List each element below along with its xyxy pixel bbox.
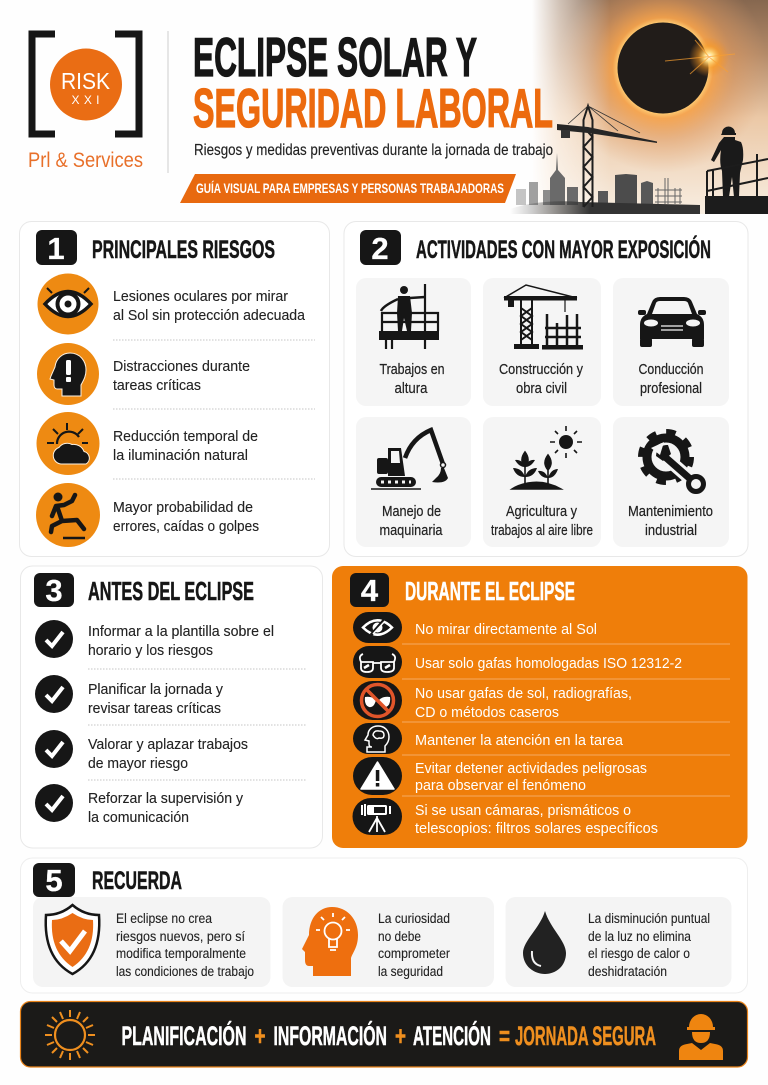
formula text: +: [254, 1021, 266, 1051]
risk text 2: tareas críticas: [113, 377, 201, 394]
risk text 4: Mayor probabilidad de: [113, 499, 253, 516]
label: altura: [394, 381, 428, 397]
logo: XXI: [72, 93, 100, 107]
check item 4: Reforzar la supervisión y: [88, 790, 243, 807]
icon: sun and cloud: [36, 412, 100, 475]
text: La disminución puntual: [588, 911, 710, 926]
check item 1: horario y los riesgos: [88, 642, 213, 659]
icon: sun: [45, 1010, 95, 1060]
formula text: PLANIFICACIÓN: [122, 1020, 246, 1051]
card: riesgos nuevos: [33, 897, 270, 987]
badge 1: [36, 230, 77, 266]
logo: [28, 34, 143, 172]
icon: falling person: [36, 483, 100, 547]
panel: principales riesgos: [20, 222, 330, 556]
label: [380, 504, 443, 539]
check item 4: la comunicación: [88, 809, 189, 826]
heading 4: DURANTE EL ECLIPSE: [405, 576, 575, 606]
risk text 1: Lesiones oculares por mirar: [113, 288, 288, 305]
icon: plants and sun: [512, 426, 582, 489]
measure 5: [415, 760, 647, 794]
check item 4: [35, 784, 243, 826]
label: industrial: [645, 523, 697, 539]
text: El eclipse no crea: [116, 911, 212, 926]
formula text: +: [395, 1021, 406, 1051]
badge 3: [34, 573, 74, 608]
risk text 4: [113, 499, 259, 535]
label: Agricultura y: [506, 504, 578, 520]
badge 5: 5: [45, 863, 63, 898]
logo: Prl & Services: [28, 149, 143, 172]
banner: GUÍA VISUAL PARA EMPRESAS Y PERSONAS TRABAJADORAS: [196, 180, 504, 196]
formula text: ATENCIÓN: [413, 1020, 491, 1051]
icon: head alert: [37, 343, 99, 405]
text: de la luz no elimina: [588, 929, 691, 944]
check item 1: Informar a la plantilla sobre el: [88, 623, 274, 640]
label: [499, 362, 584, 397]
badge 4: 4: [361, 573, 379, 608]
formula text: =: [499, 1021, 510, 1051]
badge 4: [350, 573, 389, 608]
text: comprometer: [378, 946, 450, 961]
icon: worker on scaffold: [379, 284, 439, 349]
icon: crane and building: [504, 285, 583, 350]
icon: head with lightbulb: [302, 907, 358, 976]
subtitle: Riesgos y medidas preventivas durante la jornada de trabajo: [194, 142, 553, 159]
formula text: INFORMACIÓN: [274, 1020, 387, 1051]
heading 5: RECUERDA: [92, 867, 182, 895]
icon: crossed eye: [353, 612, 402, 643]
formula text: JORNADA SEGURA: [515, 1021, 656, 1051]
text: modifica temporalmente: [116, 946, 246, 961]
icon: warning triangle: [353, 757, 402, 795]
icon: no sunglasses: [353, 681, 402, 720]
text: la seguridad: [378, 964, 443, 979]
risk text 1: [113, 288, 306, 324]
label: obra civil: [516, 381, 567, 397]
badge 2: [360, 230, 401, 266]
text: [116, 911, 254, 979]
card: curiosidad: [282, 897, 494, 987]
check item 2: [35, 675, 223, 717]
icon: worker with helmet: [679, 1014, 723, 1060]
header: [28, 0, 768, 214]
badge 1: 1: [47, 231, 65, 266]
label: [380, 362, 444, 397]
label: Mantenimiento: [628, 504, 713, 520]
check item 3: de mayor riesgo: [88, 755, 188, 772]
icon: head with brain: [353, 723, 402, 754]
badge 5: [33, 863, 75, 898]
text: el riesgo de calor o: [588, 946, 690, 961]
measure 3: No usar gafas de sol, radiografías,: [415, 685, 632, 702]
heading 3: ANTES DEL ECLIPSE: [88, 576, 254, 606]
measure 5: para observar el fenómeno: [415, 777, 586, 794]
measure 5: Evitar detener actividades peligrosas: [415, 760, 647, 777]
badge 3: 3: [45, 573, 63, 608]
title: [193, 26, 553, 139]
label: profesional: [640, 381, 702, 397]
label: [638, 362, 704, 397]
text: La curiosidad: [378, 911, 450, 926]
panel: antes del eclipse: [20, 566, 322, 848]
check item 3: [35, 730, 248, 772]
card: conduccion: [613, 278, 729, 406]
text: deshidratación: [588, 964, 667, 979]
check item 2: Planificar la jornada y: [88, 681, 223, 698]
label: Manejo de: [382, 504, 441, 520]
label: Trabajos en: [380, 362, 444, 378]
card: agricultura: [483, 417, 601, 547]
check item 1: [35, 620, 274, 659]
panel: actividades con mayor exposicion: [344, 222, 748, 556]
card: calor: [506, 897, 732, 987]
eclipse illustration: [510, 0, 768, 214]
icon: water drop: [523, 911, 566, 974]
footer formula bar: [20, 1002, 748, 1067]
banner: [180, 174, 516, 203]
formula text: [122, 1020, 656, 1051]
icon: excavator: [371, 430, 448, 489]
risk text 1: al Sol sin protección adecuada: [113, 307, 306, 324]
label: [628, 504, 713, 539]
title: ECLIPSE SOLAR Y: [193, 26, 477, 88]
risk text 2: Distracciones durante: [113, 358, 250, 375]
text: no debe: [378, 929, 421, 944]
check item 3: Valorar y aplazar trabajos: [88, 736, 248, 753]
text: riesgos nuevos, pero sí: [116, 929, 245, 944]
risk text 2: [113, 358, 250, 394]
icon: safety glasses: [353, 646, 402, 678]
label: maquinaria: [380, 523, 443, 539]
card: trabajos en altura: [356, 278, 471, 406]
card: mantenimiento: [613, 417, 729, 547]
measure 3: CD o métodos caseros: [415, 704, 559, 721]
icon: gear and wrench: [641, 432, 704, 492]
risk text 3: la iluminación natural: [113, 447, 248, 464]
text: las condiciones de trabajo: [116, 964, 254, 979]
icon: eye: [38, 274, 98, 334]
label: Conducción: [638, 362, 704, 378]
measure 6: [415, 802, 658, 837]
text: [588, 911, 710, 979]
badge 2: 2: [371, 231, 389, 266]
label: trabajos al aire libre: [491, 523, 593, 539]
heading 1: PRINCIPALES RIESGOS: [92, 236, 275, 264]
panel: recuerda: [20, 858, 748, 993]
measure 3: [415, 685, 632, 721]
text: [378, 911, 450, 979]
measure 4: Mantener la atención en la tarea: [415, 732, 624, 749]
icon: shield: [46, 905, 99, 974]
icon: camera on tripod: [352, 798, 402, 835]
measure 2: Usar solo gafas homologadas ISO 12312-2: [415, 655, 682, 672]
icon: car: [638, 297, 706, 347]
risk text 3: [113, 428, 258, 464]
card: construccion: [483, 278, 601, 406]
measure 6: telescopios: filtros solares específicos: [415, 820, 658, 837]
check item 2: revisar tareas críticas: [88, 700, 221, 717]
risk text 3: Reducción temporal de: [113, 428, 258, 445]
label: [491, 504, 593, 539]
logo: RISK: [61, 68, 111, 94]
panel: durante el eclipse: [332, 566, 748, 848]
label: Construcción y: [499, 362, 584, 378]
card: maquinaria: [356, 417, 471, 547]
risk text 4: errores, caídas o golpes: [113, 518, 259, 535]
measure 6: Si se usan cámaras, prismáticos o: [415, 802, 631, 819]
measure 1: No mirar directamente al Sol: [415, 621, 597, 638]
